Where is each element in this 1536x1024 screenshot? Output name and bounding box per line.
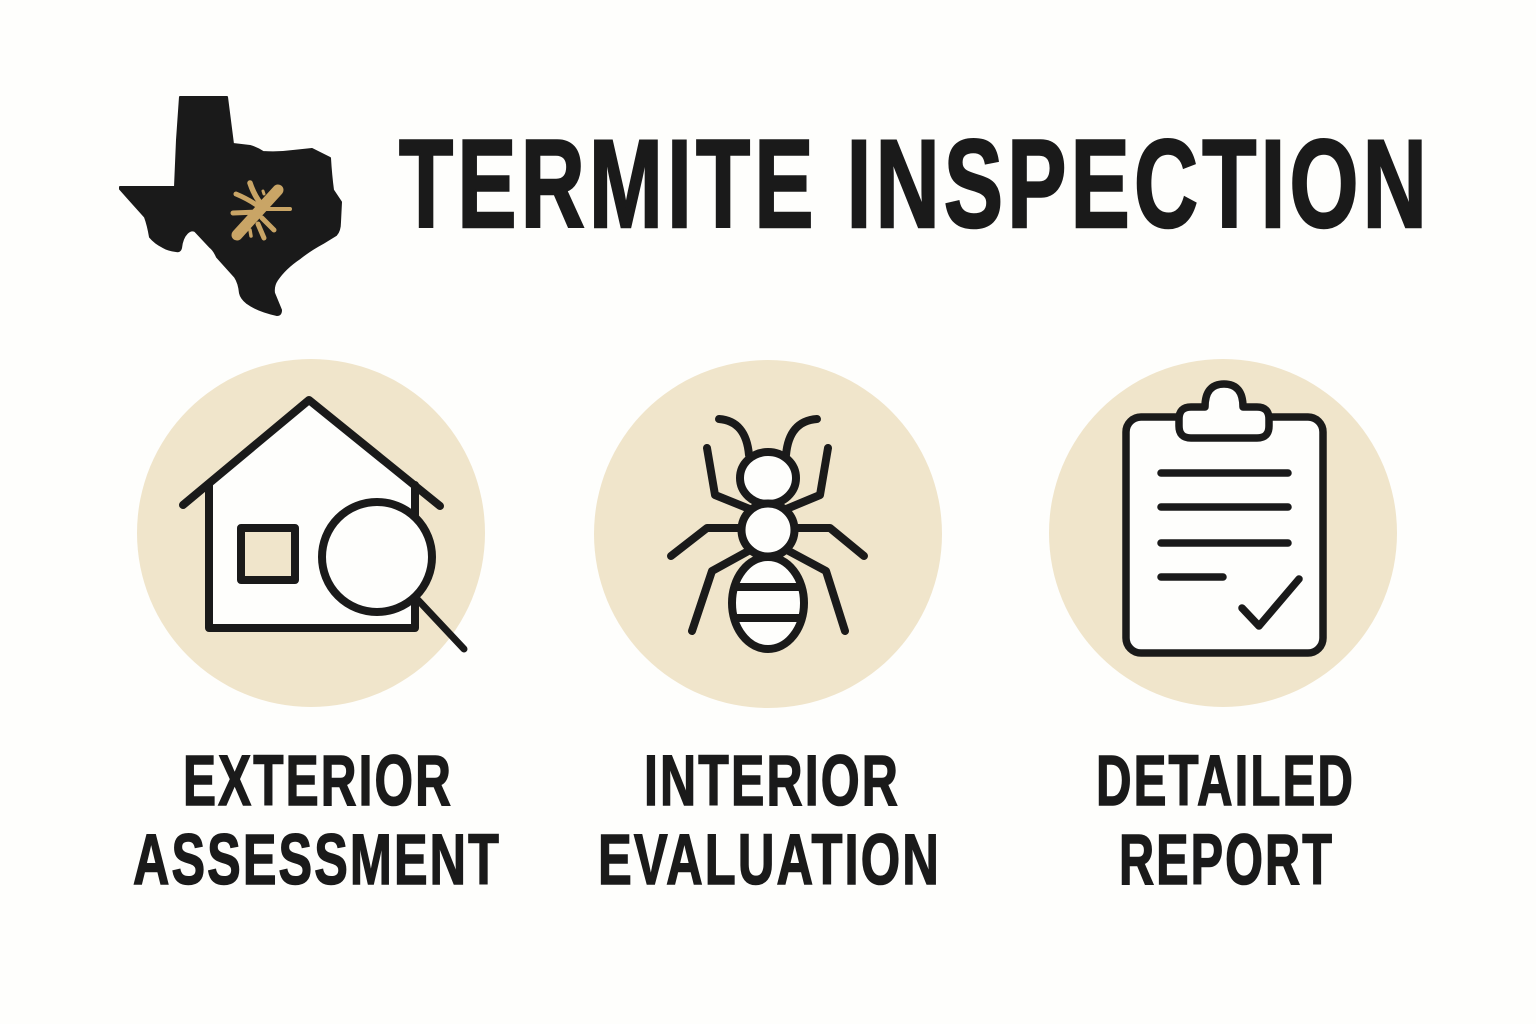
- label: exterior assessment: ASSESSMENT: [133, 821, 501, 900]
- label: detailed report: [1096, 742, 1355, 900]
- icon: Texas map with termite: [120, 97, 341, 315]
- icon: clipboard with checkmark: [1126, 384, 1323, 653]
- icon: house with magnifying glass: [183, 400, 464, 649]
- label: interior evaluation: [598, 742, 941, 900]
- label: exterior assessment: [133, 742, 501, 900]
- panel: interior evaluation: [594, 360, 942, 900]
- circle background: report: [1049, 359, 1397, 707]
- icon: termite: [671, 419, 864, 649]
- panel: exterior assessment: [133, 359, 501, 900]
- label: exterior assessment: EXTERIOR: [183, 742, 453, 821]
- label: interior evaluation: EVALUATION: [598, 821, 941, 900]
- icon: gold termite splat: [233, 183, 290, 238]
- label: interior evaluation: INTERIOR: [644, 742, 900, 821]
- circle background: exterior: [137, 359, 485, 707]
- circle background: interior: [594, 360, 942, 708]
- label: detailed report: REPORT: [1119, 821, 1334, 900]
- label: detailed report: DETAILED: [1096, 742, 1355, 821]
- panel: detailed report: [1049, 359, 1397, 900]
